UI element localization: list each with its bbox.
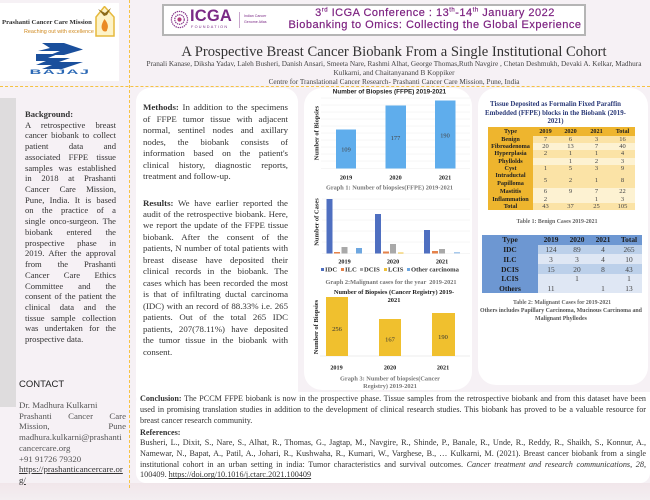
conference title: 3rd ICGA Conference : 13th-14th January 2022: [315, 7, 555, 19]
table: benign cases: 2: [544, 196, 547, 202]
text block: results: patients, 207(78.11%) have deposited: [143, 324, 288, 334]
table: benign cases: Fibroadenoma: [491, 143, 530, 150]
bar chart: cancer registry biopsies: 2021: [388, 297, 400, 304]
table: malignant cases: 4: [601, 245, 605, 254]
text block: results: clinical records in the biobank. The: [143, 266, 288, 276]
table: malignant cases: Type: [502, 235, 518, 244]
text block: contact details: Dr. Madhura Kulkarni: [19, 400, 97, 410]
text block: results: Results: We have earlier reported the: [143, 198, 288, 208]
table: malignant cases: 3: [575, 254, 579, 264]
legend: cancer types: ILC: [345, 266, 357, 274]
text block: contact details: Mission, Pune: [19, 421, 126, 431]
bar chart: cancer registry biopsies: 2019: [330, 364, 343, 372]
table: benign cases: Intraductal: [495, 172, 526, 179]
table: benign cases: 1: [544, 165, 547, 172]
table: benign cases: Cyst: [504, 165, 517, 172]
bar chart: cancer registry biopsies: 167: [385, 336, 396, 344]
table: benign cases: Type: [504, 128, 517, 135]
text block: background: 2019. After the approval: [25, 248, 116, 258]
table: benign cases: 7: [544, 136, 547, 143]
table: benign cases: Inflammation: [492, 196, 529, 202]
table: malignant cases: 2020: [570, 235, 584, 244]
table: benign cases: 7: [595, 188, 598, 195]
table: benign cases: 20: [542, 143, 549, 150]
legend: cancer types: IDC: [325, 266, 337, 274]
table: benign cases: Hyperplasia: [494, 150, 527, 157]
caption: graph 3: Graph 3: Number of biopsies(Cancer: [340, 376, 440, 382]
bar chart: biopsies FFPE: 190: [440, 132, 450, 140]
text block: methods: normal, sentinel nodes and axillary: [143, 125, 288, 135]
table: malignant cases: DCIS: [501, 264, 519, 274]
authors: Kulkarni, and Chaitanyanand B Koppiker: [333, 68, 454, 76]
text block: conclusion: breast cancer research community.: [140, 416, 252, 424]
table: benign cases: 2019: [539, 128, 552, 135]
text block: background: was undertaken for the: [25, 323, 116, 333]
bar chart: cancer registry biopsies: Number of Biopsies: [313, 299, 320, 354]
text block: methods: Methods: In addition to the specimens: [143, 102, 288, 112]
text block: background: consent of the patient the: [25, 291, 116, 301]
heading: tissue deposited table: Embedded (FFPE) blocks in the Biobank (2019-: [485, 110, 626, 117]
table: benign cases: 4: [621, 150, 624, 157]
text block: background: single onco-surgeon. The: [25, 216, 116, 226]
table: malignant cases: 1: [575, 274, 579, 283]
table: benign cases: 5: [544, 176, 547, 184]
conference title: [288, 6, 582, 31]
table: benign cases: 16: [619, 136, 626, 143]
text block: results: (IDC) with an record of 88.33% i.e. 265: [143, 301, 288, 311]
text block: background: prospective data.: [25, 334, 83, 344]
table: benign cases: Total: [504, 202, 517, 210]
text block: background: tissue sample collection: [25, 313, 116, 323]
note: others definition: Others includes Papillary Carcinoma, Mucinous Carcinoma and: [480, 308, 642, 314]
table: benign cases: 43: [542, 202, 549, 210]
legend: cancer types: LCIS: [388, 266, 404, 274]
table: benign cases: 3: [595, 136, 598, 143]
table: malignant cases: Others: [499, 284, 521, 293]
text block: references: [140, 438, 646, 479]
table: benign cases: 40: [619, 143, 626, 150]
table: malignant cases: IDC: [503, 245, 517, 254]
table: benign cases: 1: [569, 158, 572, 165]
bar chart: malignant cases: 2021: [436, 258, 448, 266]
table: benign cases: 2: [595, 158, 598, 165]
panel: tables: [478, 88, 648, 385]
table: benign cases: 2020: [564, 128, 577, 135]
caption: table 2: Table 2: Malignant Cases for 2019-2021: [513, 300, 611, 306]
text block: background: Cancer Care Mission,: [25, 184, 116, 194]
text block: conclusion: [140, 394, 646, 425]
table: malignant cases: LCIS: [501, 274, 519, 283]
table: benign cases: 37: [567, 202, 574, 210]
bar chart: biopsies FFPE: 177: [391, 135, 400, 142]
logo: Bajaj: [30, 43, 90, 76]
bar chart: cancer registry biopsies: [313, 289, 470, 372]
table: malignant cases: [482, 235, 642, 293]
table: benign cases: Total: [616, 128, 629, 135]
text block: background: Committee and the: [25, 280, 116, 290]
text block: results: [143, 198, 288, 357]
caption: graph 1: Graph 1: Number of biopsies(FFPE) 2019-2021: [326, 184, 453, 192]
bar chart: biopsies FFPE: Number of Biopsies: [314, 105, 320, 160]
table: benign cases: 8: [621, 176, 624, 184]
text block: background: patient data and: [25, 141, 116, 151]
text block: conclusion: used in promising translation studies in addition to the development of clinical research studies. This biobank has proved to be a valuable resource for: [140, 404, 646, 414]
table: malignant cases: 11: [547, 284, 555, 293]
table: malignant cases: 265: [623, 245, 635, 254]
left grey strip: [0, 98, 16, 407]
note: others definition: Malignant Phyllodes: [535, 316, 587, 322]
caption: graph 2: Graph 2:Malignant cases for the year 2019-2021: [325, 279, 457, 286]
text block: references: Namewar, N., Bapat, A., Patil, A., Johari, R., Kushwaha, R., Kumari, W., Varghese, B., … Kulkarni, M. (2021). Breast cancer biobank from a single: [140, 449, 646, 458]
table: benign cases: Papilloma: [497, 180, 524, 187]
table: benign cases: 22: [619, 188, 626, 195]
heading: tissue deposited table: [485, 101, 626, 125]
table: benign cases: Benign: [501, 136, 520, 143]
table: malignant cases: 89: [573, 245, 581, 254]
table: malignant cases: 1: [627, 274, 631, 283]
bar chart: malignant cases: 2020: [387, 258, 399, 266]
text block: results: biobank. After the consent of the: [143, 232, 288, 242]
table: malignant cases: 3: [549, 254, 553, 264]
contact heading: CONTACT: [19, 379, 64, 390]
logo: ICGA Foundation: Indian Cancer: [244, 14, 266, 18]
text block: methods: nodes, the biobank consists of: [143, 137, 288, 147]
logo: Bajaj: BAJAJ: [30, 69, 90, 76]
caption: table 1: Table 1: Benign Cases 2019-2021: [517, 219, 597, 225]
text block: background: Cancer Care Ethics: [25, 270, 116, 280]
text block: contact details: +91 91726 79320: [19, 454, 81, 464]
text block: results: the tumor tissue in the biobank with: [143, 335, 288, 345]
table: malignant cases: 1: [601, 284, 605, 293]
table: malignant cases: 15: [547, 264, 555, 274]
note: others definition: [480, 308, 642, 322]
bar chart: biopsies FFPE: 109: [341, 146, 351, 154]
text block: results: consent.: [143, 347, 172, 357]
table: malignant cases: ILC: [503, 254, 517, 264]
bar chart: biopsies FFPE: 2019: [340, 174, 352, 182]
logos panel: [0, 3, 119, 81]
heading: tissue deposited table: 2021): [547, 118, 564, 125]
table: benign cases: 105: [618, 202, 627, 210]
title: A Prospective Breast Cancer Biobank From a Single Institutional Cohort: [181, 44, 607, 60]
table: malignant cases: 13: [625, 284, 633, 293]
table: benign cases: 2: [544, 150, 547, 157]
text block: contact details: Prashanti Cancer Care: [19, 411, 126, 421]
heading: tissue deposited table: Tissue Deposited as Formalin Fixed Paraffin: [490, 101, 621, 108]
table: benign cases: Phyllolds: [498, 158, 523, 165]
text block: methods: treatment and follow-up.: [143, 171, 231, 181]
table: benign cases: 6: [569, 136, 572, 143]
conference banner: [162, 4, 586, 36]
panel: conclusion and references: [136, 392, 650, 483]
table: malignant cases: 2019: [544, 235, 558, 244]
table: benign cases: 5: [569, 165, 572, 172]
panel: methods and results: [136, 88, 298, 410]
panel: graphs: [304, 88, 472, 390]
text block: contact details: g/: [19, 475, 26, 485]
logo: ICGA Foundation: FOUNDATION: [191, 24, 228, 28]
bottom band: [0, 483, 650, 500]
table: benign cases: 7: [595, 143, 598, 150]
logo: ICGA Foundation: Genome Atlas: [244, 20, 267, 24]
legend: cancer types: Other carcinoma: [411, 266, 460, 274]
table: malignant cases: 8: [601, 264, 605, 274]
text block: methods: clinical history, diagnostic reports,: [143, 160, 288, 170]
logo: Prashanti Cancer Care Mission: Reaching out with excellence: [24, 29, 94, 35]
bar chart: biopsies FFPE: [314, 88, 470, 182]
text block: contact details: cancercare.org: [19, 443, 70, 453]
text block: results: audit of the retrospective biobank. Here,: [143, 209, 288, 219]
text block: results: patients, N number of total patients with: [143, 243, 288, 253]
table: benign cases: 13: [567, 143, 574, 150]
text block: background: prospective phase in: [25, 238, 116, 248]
bar chart: cancer registry biopsies: Number of Biopsies (Cancer Registry) 2019-: [334, 289, 454, 296]
table: malignant cases: 20: [573, 264, 581, 274]
table: benign cases: 1: [569, 150, 572, 157]
text block: results: we report the update of the FFPE tissue: [143, 220, 288, 230]
text block: conclusion: Conclusion: The PCCM FFPE biobank is now in the prospective phase. Tissue samples from the retrospective biobank and from this dataset have been: [140, 394, 646, 402]
authors: Pranali Kanase, Diksha Yadav, Laleh Busheri, Danish Ansari, Smeeta Nare, Rashmi Alhat, George Thomas,Ruth Navgire , Chetan Deshmukh, Devaki A. Kelkar, Madhura: [147, 60, 641, 68]
caption: graph 3: Registry) 2019-2021: [363, 383, 417, 390]
table: benign cases: 1: [595, 150, 598, 157]
text block: results: is that of infiltrating ductal carcinoma: [143, 289, 288, 299]
table: benign cases: [488, 127, 635, 210]
text block: results: breast disease have deposited their: [143, 255, 288, 265]
table: malignant cases: 124: [545, 245, 557, 254]
text block: methods: of FFPE tumor tissue with adjacent: [143, 114, 288, 124]
bar chart: biopsies FFPE: 2021: [439, 174, 451, 182]
table: malignant cases: 2021: [596, 235, 610, 244]
legend: cancer types: [321, 266, 460, 274]
table: benign cases: 6: [544, 188, 547, 195]
table: benign cases: 3: [621, 158, 624, 165]
table: benign cases: 1: [595, 176, 598, 184]
table: malignant cases: Total: [621, 235, 637, 244]
text block: background: associated FFPE tissue: [25, 152, 116, 162]
table: benign cases: 9: [621, 165, 624, 172]
logo: ICGA Foundation: [170, 6, 267, 28]
text block: contact details: madhura.kulkarni@prashanti: [19, 432, 122, 442]
affiliation: Centre for Translational Cancer Research- Prashanti Cancer Care Mission, Pune, India: [269, 78, 519, 86]
text block: methods: [143, 102, 288, 181]
bar chart: malignant cases: [314, 198, 470, 274]
table: malignant cases: 10: [625, 254, 633, 264]
table: malignant cases: 43: [625, 264, 633, 274]
text block: background: cancer biobank to collect: [25, 130, 116, 140]
table: benign cases: 3: [595, 165, 598, 172]
text block: background: in 2018 at Prashanti: [25, 173, 116, 183]
text block: methods: information based on the patient's: [143, 148, 288, 158]
text block: background: biobank entered the: [25, 227, 116, 237]
text block: background: [25, 109, 116, 344]
table: benign cases: Mastitis: [500, 188, 521, 195]
table: benign cases: 9: [569, 188, 572, 195]
heading: references: References:: [140, 428, 180, 436]
table: benign cases: 2021: [590, 128, 603, 135]
text block: results: cases which has been recorded the most: [143, 278, 288, 288]
table: benign cases: 1: [595, 196, 598, 202]
table: benign cases: 25: [593, 202, 600, 210]
bar chart: cancer registry biopsies: 2020: [384, 364, 396, 372]
text block: references: 100409. https://doi.org/10.1016/j.ctarc.2021.100409: [140, 470, 311, 479]
bar chart: cancer registry biopsies: 256: [332, 326, 343, 333]
text block: references: Busheri, L., Dixit, S., Nare, S., Alhat, R., Thomas, G., Jagtap, M., Navgire, R., Shinde, P., Banale, R., Unde, R., Reddy, R., Shaikh, S., Konnur, A.,: [140, 438, 646, 447]
text block: contact details: https://prashanticancercare.or: [19, 464, 123, 474]
text block: background: Pune, India. It is based: [25, 195, 116, 205]
text block: background: A retrospective breast: [25, 120, 116, 130]
bar chart: biopsies FFPE: Number of Biopsies (FFPE) 2019-2021: [333, 88, 447, 96]
text block: results: patients. Out of the total 265 IDC: [143, 312, 288, 322]
logo: Prashanti Cancer Care Mission: Prashanti Cancer Care Mission: [2, 19, 92, 26]
bar chart: biopsies FFPE: 2020: [389, 174, 402, 182]
text block: references: institutional cohort in an urban setting in india: Tumor characteristics and survival outcomes. Cancer treatment and research communications, 28,: [140, 460, 646, 469]
table: malignant cases: 4: [601, 254, 605, 264]
text block: contact details: [19, 400, 126, 485]
legend: cancer types: DCIS: [364, 266, 380, 274]
bar chart: cancer registry biopsies: 2021: [437, 364, 449, 372]
authors: [146, 60, 642, 76]
text block: background: clinical data and the: [25, 302, 116, 312]
bar chart: malignant cases: Number of Cases: [314, 198, 320, 246]
bar chart: malignant cases: 2019: [338, 258, 351, 266]
logo: Prashanti Cancer Care Mission: [2, 6, 115, 37]
table: benign cases: 3: [621, 196, 624, 202]
conference title: Biobanking to Omics: Collecting the Global Experience: [288, 19, 582, 31]
text block: background: Background:: [25, 109, 73, 119]
table: benign cases: 2: [569, 176, 572, 184]
text block: background: samples was established: [25, 163, 116, 173]
text block: background: from the Prashanti: [25, 259, 116, 269]
bar chart: cancer registry biopsies: 190: [438, 334, 448, 341]
text block: background: on the practice of a: [25, 205, 116, 215]
logo: ICGA Foundation: ICGA: [190, 6, 232, 24]
